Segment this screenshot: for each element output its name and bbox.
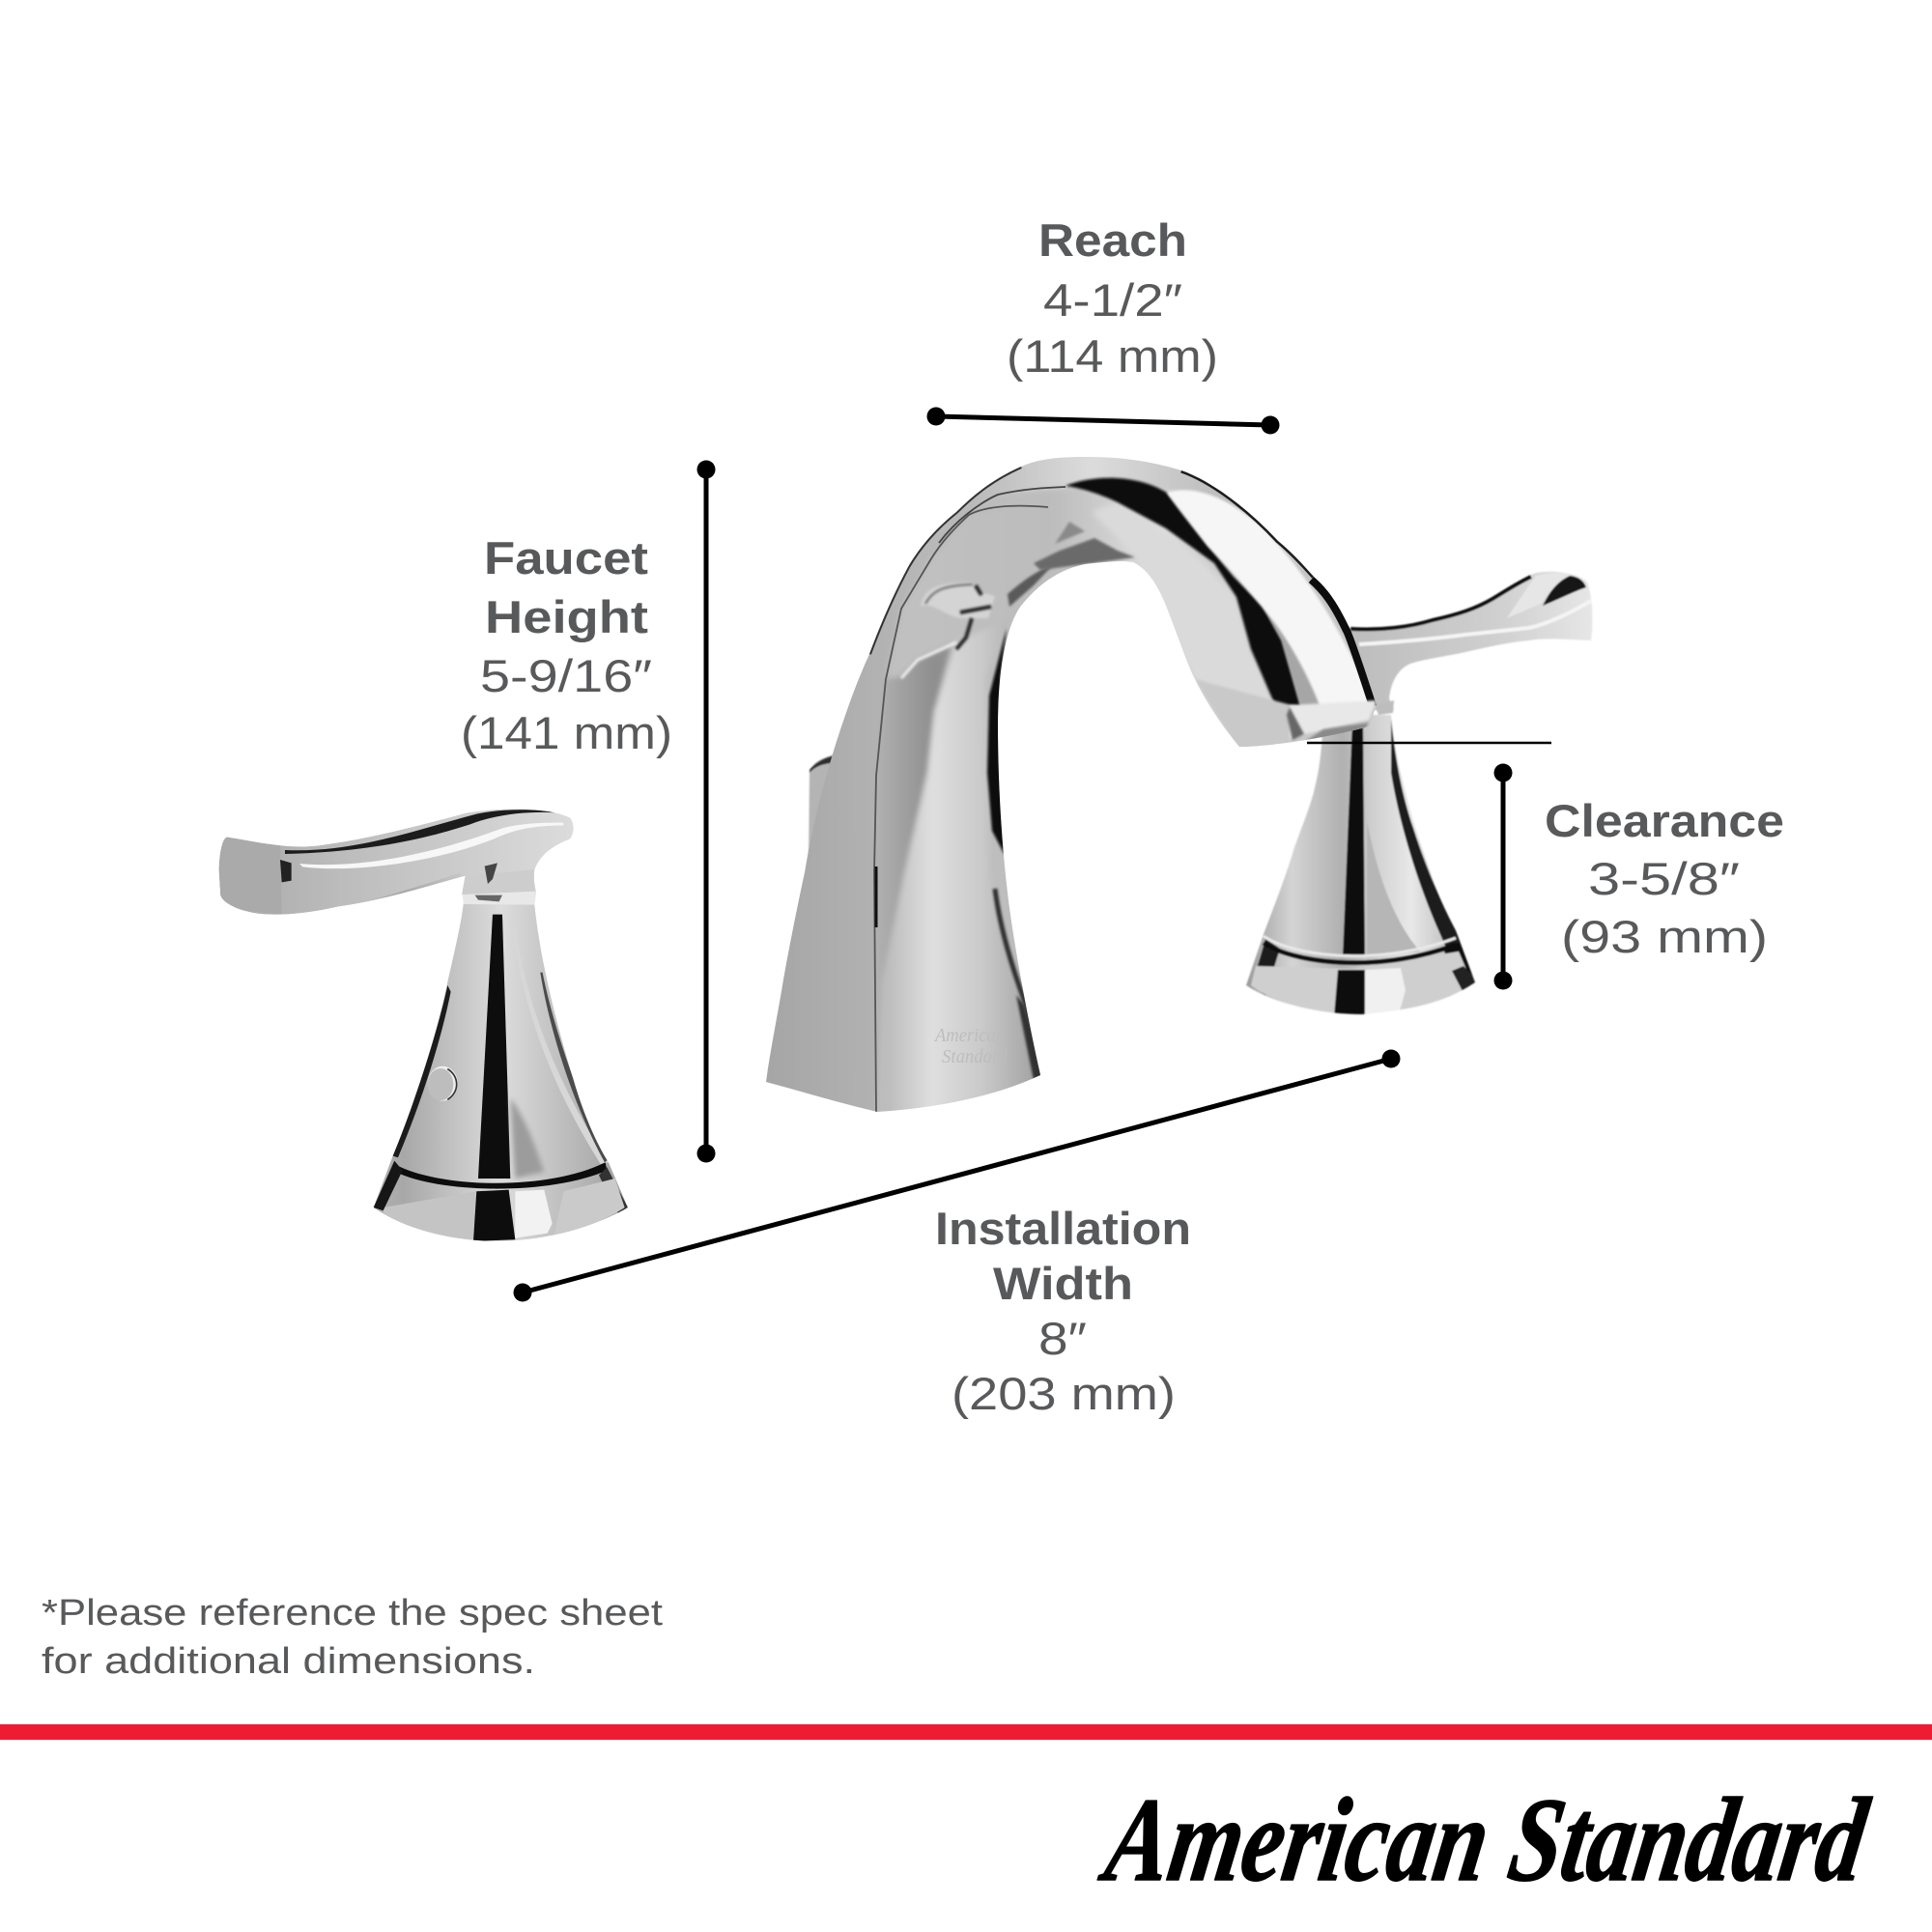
label: faucet height: Faucet	[484, 532, 648, 583]
label: reach: 4-1/2″	[1043, 274, 1182, 326]
label: faucet height: (141 mm)	[461, 707, 672, 758]
label: installation width: Width	[993, 1258, 1133, 1309]
red divider bar	[0, 1724, 1932, 1740]
footnote: *Please reference the spec sheet	[42, 1593, 664, 1634]
dimension line: clearance	[1307, 743, 1551, 989]
icon: left handle	[213, 802, 638, 1249]
label: installation width	[935, 1203, 1191, 1419]
knot highlight	[921, 582, 995, 618]
label: installation width: Installation	[935, 1203, 1191, 1254]
icon: right handle	[1236, 572, 1592, 1024]
label: reach: Reach	[1038, 214, 1187, 266]
sliver	[1264, 611, 1319, 705]
tip	[1195, 679, 1377, 752]
label: clearance	[1545, 795, 1784, 962]
label: faucet height: Height	[485, 591, 648, 642]
label: faucet height: 5-9/16″	[480, 650, 652, 701]
underside streaks	[1008, 565, 1053, 607]
label: installation width: 8″	[1038, 1313, 1087, 1364]
label: installation width: (203 mm)	[952, 1368, 1176, 1419]
engraved logo on the spout: American	[933, 1025, 1005, 1046]
icon: rear handle stub	[809, 754, 835, 863]
spout soft body shading	[753, 444, 1391, 1121]
inner column dark edge	[987, 628, 1007, 855]
dimension line: reach	[927, 408, 1279, 435]
dimension line: installation width	[514, 1049, 1401, 1302]
icon: spout	[753, 444, 1391, 1121]
contour lines	[874, 506, 1048, 1112]
label: clearance: 3-5/8″	[1588, 853, 1740, 904]
engraved logo on the spout: Standard	[942, 1046, 1009, 1067]
black sweep	[1065, 478, 1301, 708]
white highlight	[1167, 490, 1372, 710]
engraved logo on the spout	[933, 1025, 1009, 1067]
label: reach: (114 mm)	[1007, 330, 1218, 382]
footnote	[42, 1593, 664, 1682]
label: clearance: Clearance	[1545, 795, 1784, 846]
label: clearance: (93 mm)	[1561, 911, 1768, 962]
dimension line: faucet height	[697, 460, 715, 1163]
outer right dark edge	[1181, 470, 1314, 577]
footnote: for additional dimensions.	[42, 1641, 535, 1682]
label: reach	[1007, 214, 1218, 382]
label: faucet height	[461, 532, 672, 758]
